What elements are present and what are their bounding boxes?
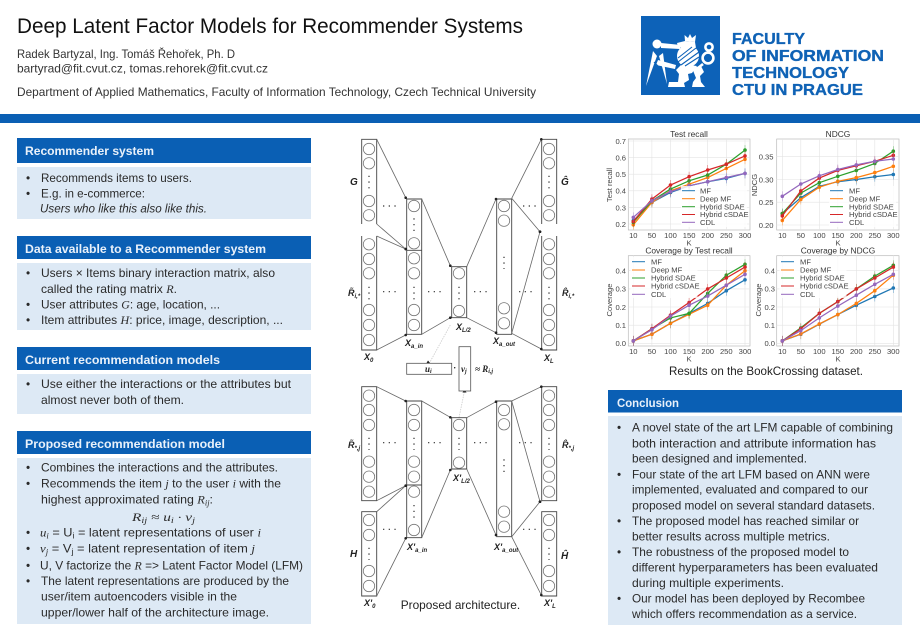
- chart: test recall: 0.5: [615, 170, 626, 179]
- user autoencoder (upper half): i,*: [568, 294, 575, 300]
- chart: test recall: 250: [720, 231, 733, 240]
- panel: conclusion: better results across multiple metrics.: [632, 529, 830, 543]
- chart: test recall: Deep MF: [700, 194, 732, 203]
- panel: proposed recommendation model: u: [40, 526, 46, 540]
- chart: coverage by NDCG: MF: [800, 257, 811, 266]
- panel: proposed recommendation model: •: [26, 526, 30, 540]
- chart: coverage by NDCG: 100: [813, 347, 826, 356]
- panel: recommender system: Recommender system: [25, 144, 154, 158]
- chart: test recall: 100: [664, 231, 677, 240]
- chart: NDCG: CDL: [849, 218, 864, 227]
- chart: test recall: 0.7: [615, 137, 626, 146]
- panel: conclusion: during multiple experiments.: [632, 576, 784, 590]
- chart: coverage by test recall: 10: [629, 347, 638, 356]
- panel: conclusion: proposed model on several standard datasets.: [632, 498, 875, 512]
- chart: test recall: CDL: [700, 218, 715, 227]
- chart: coverage by test recall: 300: [739, 347, 751, 356]
- chart: NDCG: [750, 129, 900, 248]
- panel: proposed recommendation model: = V: [48, 542, 72, 556]
- authors: Radek Bartyzal, Ing. Tomáš Řehořek, Ph. D: [17, 46, 235, 61]
- chart: coverage by NDCG: 0.1: [764, 321, 775, 330]
- panel: conclusion: both interaction and attribute information has: [632, 436, 876, 450]
- panel: proposed recommendation model: Combines the interactions and the attributes.: [41, 461, 278, 475]
- logo text: [732, 31, 884, 99]
- chart: coverage by NDCG: Coverage by NDCG: [801, 245, 875, 255]
- panel: conclusion: Our model has been deployed by Recombee: [632, 592, 865, 606]
- chart: NDCG: Hybrid SDAE: [849, 202, 894, 211]
- chart: coverage by test recall: 0.3: [615, 285, 626, 294]
- chart: test recall: Test recall: [605, 168, 614, 202]
- chart: coverage by test recall: Hybrid SDAE: [651, 274, 696, 283]
- panel: proposed recommendation model: = latent representation of item: [73, 542, 251, 556]
- user autoencoder (upper half): X: [493, 336, 499, 346]
- item autoencoder (lower half): 0: [372, 604, 376, 610]
- chart: test recall: 50: [648, 231, 656, 240]
- panel: proposed recommendation model: ij: [205, 498, 210, 507]
- panel: proposed recommendation model: = latent representations of user: [74, 526, 257, 540]
- panel: proposed recommendation model: •: [26, 574, 30, 588]
- user autoencoder (upper half): X: [544, 353, 550, 363]
- panel: proposed recommendation model: i: [171, 516, 174, 525]
- panel: data available: [17, 236, 311, 330]
- panel: conclusion: •: [617, 545, 621, 559]
- chart: coverage by test recall: K: [686, 354, 692, 364]
- chart: test recall: K: [686, 238, 692, 248]
- latent vector product: ·: [454, 363, 456, 373]
- panel: data available: User attributes G: age, location, ...: [41, 298, 220, 312]
- chart: NDCG: 0.20: [759, 221, 774, 230]
- user autoencoder (upper half): i,*: [354, 294, 361, 300]
- panel: proposed recommendation model: upper/lower half of the architecture image.: [41, 606, 269, 620]
- panel: current recommendation models: [17, 347, 311, 414]
- chart: coverage by test recall: 50: [648, 347, 656, 356]
- chart: coverage by NDCG: 50: [797, 347, 805, 356]
- item autoencoder (lower half): X': [407, 542, 415, 552]
- user autoencoder (upper half): a_out: [499, 342, 516, 348]
- chart: coverage by test recall: Hybrid cSDAE: [651, 282, 700, 291]
- user autoencoder (upper half): Ĝ: [561, 175, 569, 188]
- item autoencoder (lower half): X': [364, 598, 372, 608]
- user autoencoder (upper half): R̃: [348, 288, 354, 298]
- chart: NDCG: MF: [849, 186, 860, 195]
- chart: coverage by NDCG: 0.4: [764, 266, 775, 276]
- user autoencoder (upper half): [348, 139, 575, 365]
- chart: NDCG: NDCG: [750, 174, 759, 196]
- logo text: OF INFORMATION: [732, 48, 884, 65]
- panel: current recommendation models: almost never both of them.: [41, 393, 184, 407]
- panel: conclusion: A novel state of the art LFM capable of combining: [632, 421, 893, 435]
- chart: coverage by NDCG: K: [835, 354, 841, 364]
- latent vector product: [407, 325, 493, 418]
- chart: test recall: MF: [700, 186, 711, 195]
- user autoencoder (upper half): X: [364, 352, 370, 362]
- panel: data available: •: [26, 313, 30, 327]
- user autoencoder (upper half): 0: [370, 358, 374, 364]
- chart: coverage by NDCG: Hybrid cSDAE: [800, 282, 849, 291]
- panel: conclusion: The robustness of the proposed model to: [632, 545, 849, 559]
- user autoencoder (upper half): R̂: [562, 288, 568, 298]
- panel: conclusion: [608, 390, 902, 625]
- panel: proposed recommendation model: i: [73, 532, 75, 541]
- chart: test recall: 0.2: [615, 220, 626, 229]
- panel: recommender system: [17, 138, 311, 219]
- chart: NDCG: 200: [850, 231, 863, 240]
- latent vector product: i: [430, 369, 432, 375]
- panel: conclusion: •: [617, 421, 621, 435]
- chart: coverage by NDCG: 250: [868, 347, 881, 356]
- user autoencoder (upper half): L/2: [462, 328, 471, 334]
- panel: current recommendation models: Current recommendation models: [25, 353, 220, 367]
- panel: data available: •: [26, 266, 30, 280]
- chart: coverage by test recall: 0.1: [615, 321, 626, 330]
- chart: coverage by NDCG: 0.2: [764, 303, 775, 312]
- panel: proposed recommendation model: ij: [141, 516, 148, 525]
- panel: proposed recommendation model: j: [191, 516, 196, 525]
- user autoencoder (upper half): L: [550, 359, 554, 365]
- chart: coverage by test recall: Coverage by Test recall: [645, 245, 733, 255]
- chart: test recall: 0.4: [615, 187, 626, 196]
- panel: conclusion: •: [617, 592, 621, 606]
- chart: coverage by test recall: Coverage: [605, 284, 614, 316]
- panel: proposed recommendation model: U, V factorize the R => Latent Factor Model (LFM): [40, 558, 303, 572]
- panel: conclusion: been designed and implemented.: [632, 452, 807, 466]
- chart: NDCG: Deep MF: [849, 194, 881, 203]
- chart: coverage by test recall: 100: [664, 347, 677, 356]
- chart: NDCG: 10: [778, 231, 787, 240]
- item autoencoder (lower half): *,j: [354, 446, 361, 452]
- panel: conclusion: Conclusion: [617, 396, 679, 410]
- chart: test recall: 0.6: [615, 154, 626, 162]
- chart: coverage by test recall: Deep MF: [651, 266, 683, 275]
- chart: NDCG: 150: [831, 231, 844, 240]
- item autoencoder (lower half): X': [544, 598, 552, 608]
- panel: proposed recommendation model: •: [26, 542, 30, 556]
- chart: coverage by test recall: 150: [683, 347, 695, 356]
- panel: proposed recommendation model: j: [70, 548, 74, 557]
- panel: conclusion: •: [617, 467, 621, 481]
- chart: coverage by NDCG: 10: [778, 347, 787, 356]
- logo text: TECHNOLOGY: [732, 65, 850, 82]
- header bar: [0, 114, 920, 123]
- item autoencoder (lower half): *,j: [568, 446, 575, 452]
- panel: proposed recommendation model: :: [210, 492, 213, 506]
- panel: proposed recommendation model: user/item autoencoders visible in the: [41, 590, 237, 604]
- chart: coverage by test recall: 250: [720, 347, 733, 356]
- item autoencoder (lower half): Ĥ: [561, 549, 569, 562]
- chart: coverage by NDCG: Coverage: [754, 284, 763, 316]
- item autoencoder (lower half): L: [552, 604, 556, 610]
- panel: data available: •: [26, 298, 30, 312]
- chart: coverage by test recall: CDL: [651, 290, 666, 299]
- logo text: CTU IN PRAGUE: [732, 82, 863, 99]
- logo text: FACULTY: [732, 31, 806, 48]
- latent vector product: i,j: [488, 369, 493, 375]
- item autoencoder (lower half): [348, 387, 575, 610]
- item autoencoder (lower half): R̃: [348, 440, 354, 450]
- panel: data available: Item attributes H: price, image, description, ...: [41, 313, 283, 327]
- panel: recommender system: Recommends items to users.: [41, 171, 192, 185]
- chart: NDCG: 0.30: [759, 175, 774, 184]
- panel: proposed recommendation model: [17, 431, 311, 624]
- chart: coverage by NDCG: Hybrid SDAE: [800, 274, 845, 283]
- chart: coverage by NDCG: 0.3: [764, 285, 775, 294]
- logo emblem: lion: [641, 16, 720, 95]
- chart: coverage by test recall: MF: [651, 257, 662, 266]
- panel: data available: Users × Items binary interaction matrix, also: [41, 266, 275, 280]
- panel: proposed recommendation model: i: [257, 526, 261, 540]
- panel: conclusion: The proposed model has reached similar or: [632, 514, 859, 528]
- chart: test recall: Test recall: [670, 129, 708, 139]
- panel: conclusion: implemented, evaluated and compared to our: [632, 483, 868, 497]
- chart: NDCG: NDCG: [826, 129, 850, 139]
- chart: test recall: Hybrid cSDAE: [700, 210, 749, 219]
- item autoencoder (lower half): X': [494, 542, 502, 552]
- chart: test recall: 0.3: [615, 203, 626, 212]
- chart: NDCG: 300: [887, 231, 900, 240]
- title: Deep Latent Factor Models for Recommender Systems: [17, 15, 523, 38]
- latent vector product: j: [464, 369, 467, 375]
- panel: proposed recommendation model: j: [249, 542, 255, 556]
- chart: coverage by NDCG: 300: [887, 347, 900, 356]
- panel: conclusion: which offers recommendation as a service.: [631, 607, 857, 621]
- panel: conclusion: Four state of the art LFM based on ANN were: [632, 467, 870, 481]
- authors: [17, 46, 268, 76]
- panel: recommender system: •: [26, 186, 30, 200]
- panel: conclusion: different hyperparameters has been evaluated: [632, 561, 878, 575]
- panel: recommender system: Users who like this also like this.: [40, 202, 207, 216]
- latent vector product: u: [425, 364, 430, 374]
- panel: conclusion: •: [617, 514, 621, 528]
- item autoencoder (lower half): L/2: [461, 479, 470, 485]
- architecture diagram: [348, 139, 575, 610]
- item autoencoder (lower half): X': [453, 473, 461, 483]
- chart: NDCG: 100: [813, 231, 826, 240]
- panel: proposed recommendation model: · v: [174, 510, 193, 524]
- panel: current recommendation models: Use either the interactions or the attributes but: [41, 377, 292, 391]
- user autoencoder (upper half): G: [350, 177, 358, 188]
- chart: NDCG: 0.35: [759, 152, 774, 162]
- panel: proposed recommendation model: j: [45, 548, 49, 557]
- chart: test recall: Hybrid SDAE: [700, 202, 745, 211]
- item autoencoder (lower half): R̂: [562, 440, 568, 450]
- chart: coverage by NDCG: 0.0: [764, 339, 775, 348]
- item autoencoder (lower half): a_out: [502, 548, 519, 554]
- caption: architecture: Proposed architecture.: [401, 598, 520, 612]
- chart: NDCG: 0.25: [759, 198, 774, 207]
- user autoencoder (upper half): X: [405, 338, 411, 348]
- chart: NDCG: K: [835, 238, 841, 248]
- latent vector product: v: [461, 364, 465, 374]
- panel: proposed recommendation model: The latent representations are produced by the: [41, 574, 289, 588]
- chart: test recall: 200: [701, 231, 714, 240]
- chart: coverage by test recall: 0.4: [615, 266, 626, 276]
- panel: recommender system: E.g. in e-commerce:: [41, 186, 145, 200]
- panel: proposed recommendation model: •: [26, 558, 30, 572]
- user autoencoder (upper half): X: [456, 322, 462, 332]
- panel: proposed recommendation model: Recommends the item j to the user i with the: [41, 477, 281, 491]
- chart: coverage by test recall: 0.0: [615, 339, 626, 348]
- chart: NDCG: 50: [797, 231, 805, 240]
- department: Department of Applied Mathematics, Faculty of Information Technology, Czech Technical University: [17, 85, 536, 99]
- item autoencoder (lower half): a_in: [415, 548, 427, 554]
- chart: coverage by NDCG: 150: [831, 347, 844, 356]
- chart: test recall: [605, 129, 751, 248]
- chart: coverage by NDCG: [754, 245, 900, 364]
- chart: coverage by NDCG: 200: [850, 347, 863, 356]
- item autoencoder (lower half): H: [350, 549, 358, 560]
- chart: test recall: 300: [739, 231, 751, 240]
- chart: coverage by NDCG: Deep MF: [800, 266, 832, 275]
- panel: proposed recommendation model: •: [26, 477, 30, 491]
- chart: coverage by test recall: 0.2: [615, 303, 626, 312]
- chart: NDCG: Hybrid cSDAE: [849, 210, 898, 219]
- panel: proposed recommendation model: R: [132, 510, 139, 524]
- panel: proposed recommendation model: Proposed recommendation model: [25, 437, 225, 451]
- panel: proposed recommendation model: i: [46, 532, 49, 541]
- user autoencoder (upper half): a_in: [411, 344, 423, 350]
- panel: proposed recommendation model: ≈ u: [147, 510, 171, 524]
- panel: proposed recommendation model: v: [40, 542, 47, 556]
- caption: results: Results on the BookCrossing dataset.: [669, 364, 863, 378]
- panel: data available: Data available to a Recommender system: [25, 242, 266, 256]
- authors: bartyrad@fit.cvut.cz, tomas.rehorek@fit.cvut.cz: [17, 62, 268, 76]
- chart: coverage by test recall: 200: [701, 347, 714, 356]
- panel: data available: called the rating matrix R.: [41, 282, 177, 296]
- chart: test recall: 10: [629, 231, 638, 240]
- chart: coverage by test recall: [605, 245, 751, 364]
- panel: proposed recommendation model: = U: [49, 526, 73, 540]
- panel: proposed recommendation model: highest approximated rating R: [41, 492, 205, 506]
- panel: proposed recommendation model: •: [26, 461, 30, 475]
- panel: recommender system: •: [26, 171, 30, 185]
- chart: test recall: 150: [683, 231, 695, 240]
- chart: coverage by NDCG: CDL: [800, 290, 815, 299]
- chart: NDCG: 250: [868, 231, 881, 240]
- latent vector product: ≈ R: [475, 364, 488, 374]
- panel: current recommendation models: •: [26, 377, 30, 391]
